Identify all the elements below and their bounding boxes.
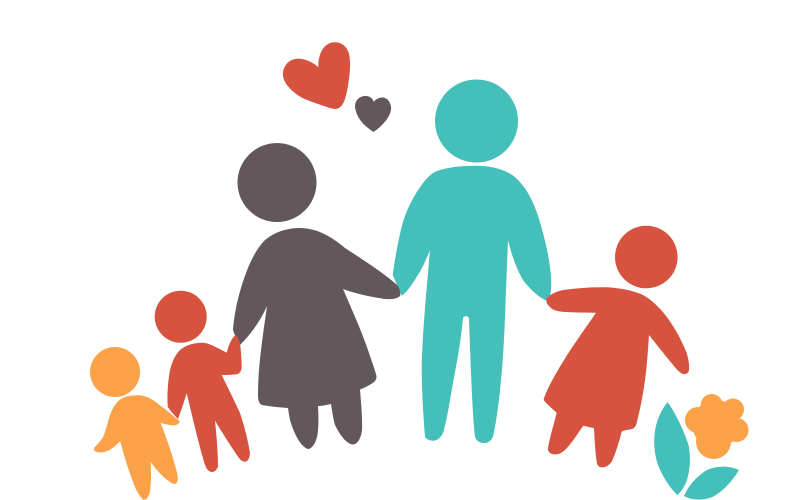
toddler head	[90, 347, 140, 397]
girl body	[544, 287, 689, 467]
mother body	[233, 228, 400, 449]
toddler body	[94, 395, 180, 500]
icon: flower	[654, 394, 748, 500]
icon: large red heart	[283, 42, 350, 109]
flower leaf upper	[654, 402, 690, 495]
icon: small grey heart	[355, 96, 391, 132]
flower blossom	[685, 394, 748, 459]
boy body	[167, 335, 250, 472]
mother head	[238, 143, 316, 222]
flower leaf lower	[684, 467, 739, 500]
boy head	[155, 291, 207, 343]
father head	[435, 80, 518, 162]
figure: mother	[233, 143, 400, 449]
figure: father	[393, 80, 551, 443]
figure: boy	[155, 291, 250, 472]
figure: toddler	[90, 347, 180, 500]
girl head	[615, 226, 678, 288]
father body	[393, 166, 551, 443]
figure: girl	[544, 226, 689, 467]
